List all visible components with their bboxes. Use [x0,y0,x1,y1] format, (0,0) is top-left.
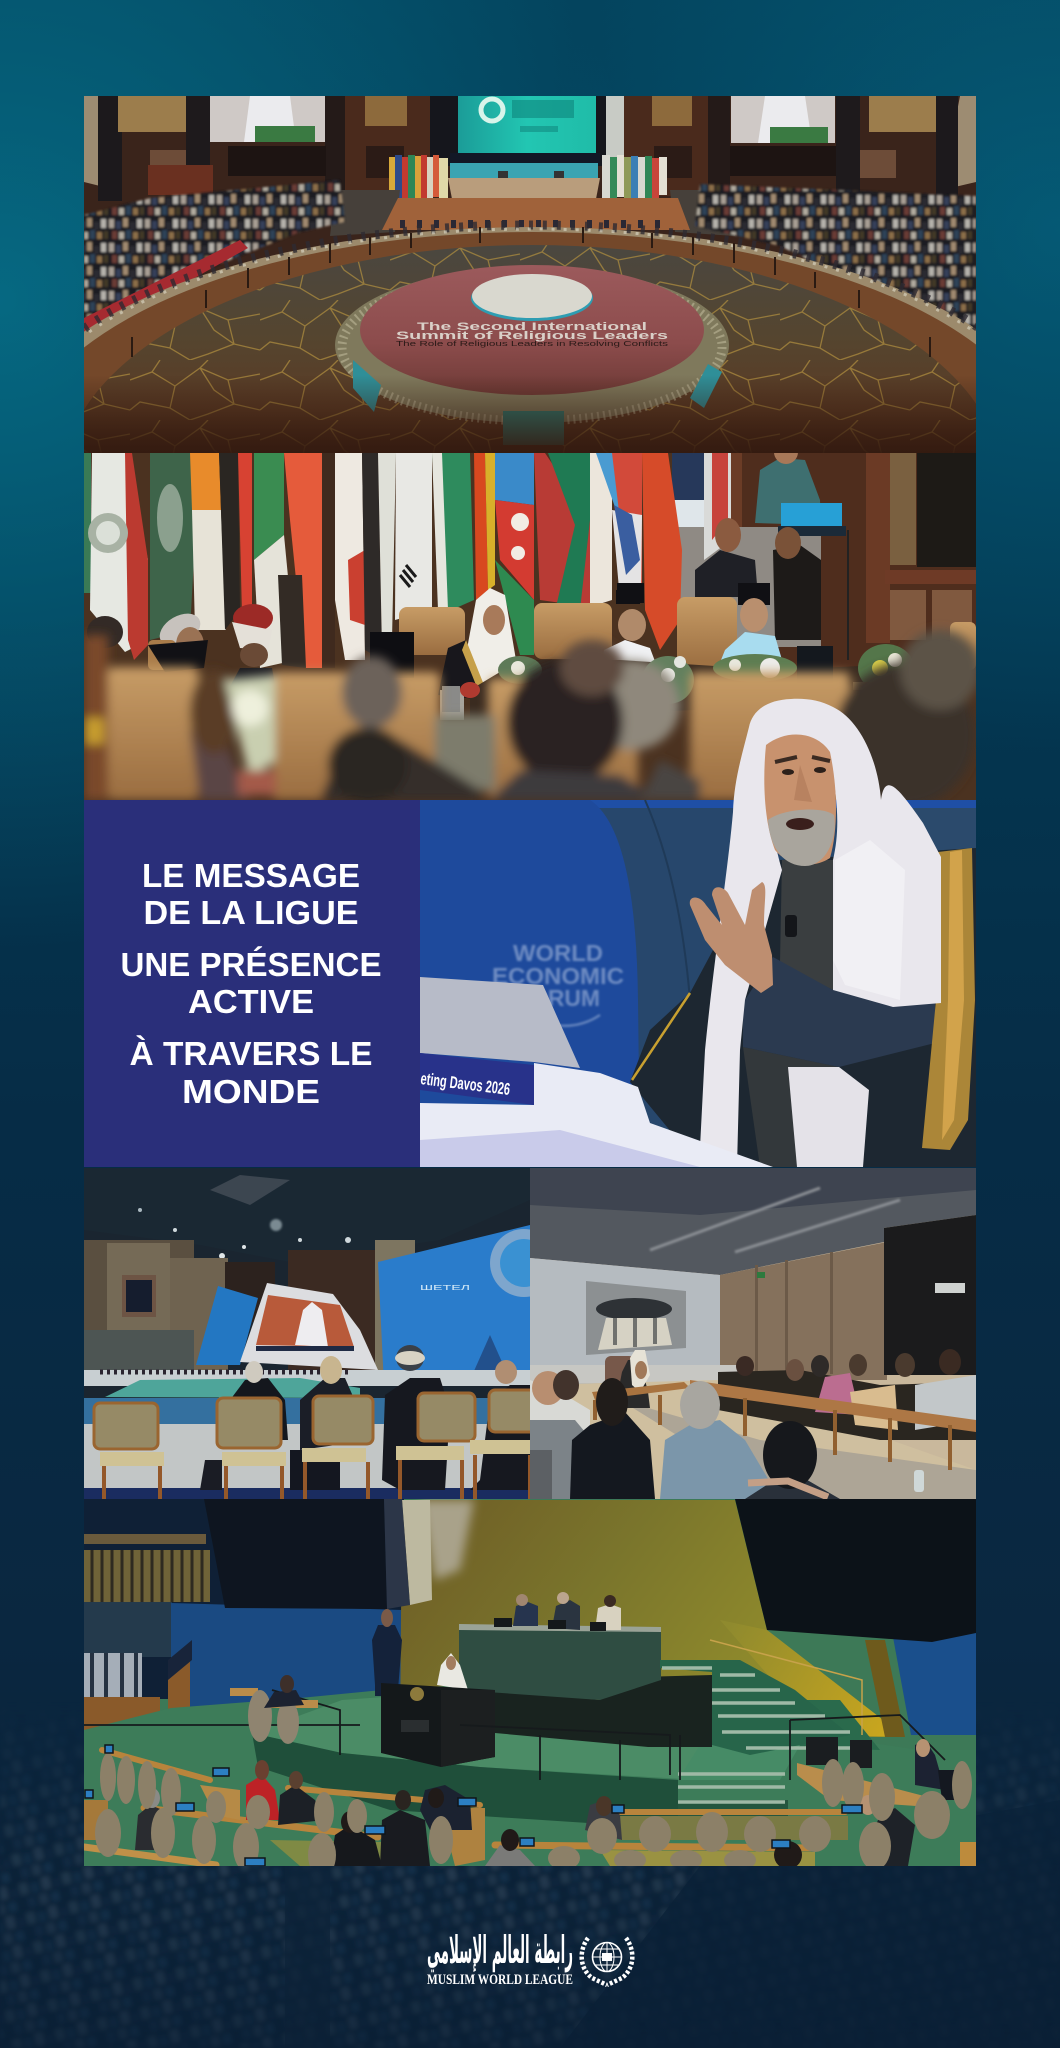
foreground delegates [530,1370,924,1499]
white wall [530,1258,720,1385]
Davos stage backdrop [420,800,976,1167]
painting [586,1281,686,1355]
photo: meeting room with delegates [530,1168,976,1499]
heading: une presence active: ACTIVE [188,983,314,1020]
centre disc with summit text: The Role of Religious Leaders in Resolving Conflicts [396,341,669,348]
table flower arrangements [498,644,914,704]
delegates desk rows [84,1750,845,1865]
flags left and right of the stage [389,155,667,201]
wood panelling [720,1242,887,1380]
delegate seats [95,1753,972,1877]
photo: summit of religious leaders hall [84,96,976,453]
railings [60,1690,945,1780]
centre stage screen [448,96,600,199]
World Economic Forum logo [492,940,624,1026]
secretariat seated left [84,1640,192,1737]
heading: le message de la ligue: LE MESSAGE [142,857,360,894]
interpreters desk left [230,1675,318,1744]
laptop [420,977,580,1068]
heading: le message de la ligue: DE LA LIGUE [144,894,358,931]
delegates seen from behind [200,1345,530,1490]
side screens [210,96,835,143]
red carpet aisle [84,240,248,340]
audience left [84,180,345,332]
heading: a travers le monde: À TRAVERS LE [130,1035,372,1072]
gold chairs row [94,1390,539,1499]
curved delegates table [10,225,1054,717]
blurred foreground chairs and heads [84,630,980,807]
dark ceiling panels [204,1499,976,1642]
seated dignitaries and chairs [87,518,976,720]
World Economic Forum logo: ECONOMIC [492,963,624,989]
icon: globe emblem with laurel wreath [582,1938,632,1985]
photo: speaker at Davos [420,698,976,1167]
desk monitors [85,1745,862,1866]
speaker figure [630,699,976,1167]
heading: le message de la ligue [142,857,360,931]
face and beard [764,735,836,865]
World Economic Forum logo: WORLD [513,940,603,966]
photo: United Nations General Assembly [84,1499,976,1866]
background crowd texture [0,1764,1045,2046]
English wordmark: MUSLIM WORLD LEAGUE [427,1972,573,1988]
presiding officers [494,1592,621,1631]
video screen on white panel [240,1283,378,1370]
heading: a travers le monde: MONDE [182,1073,320,1110]
heading: a travers le monde [130,1035,372,1110]
text: رابطة العالم الإسلامي [427,1928,573,1973]
teal table signs [353,360,722,445]
row of national flags [84,453,731,668]
raised hand [690,882,773,993]
right side desk [797,1737,957,1808]
ceiling [530,1168,976,1275]
audience right [695,184,976,348]
dark wall block [884,1215,976,1375]
white headdress [699,699,941,1167]
green floor and platform [84,1685,976,1866]
blue walls [171,1603,402,1710]
upper left balcony [84,1499,404,1699]
white podium [420,1063,773,1167]
Davos 2026 label [420,1053,534,1105]
floor in front of stage [330,190,735,236]
centre disc with summit text: The Second International [417,321,647,333]
hall back wall [84,96,976,201]
panel: navy title block [84,800,420,1167]
floor [530,1380,976,1499]
delegates [135,1760,915,1869]
conference table with green centre [84,1370,530,1499]
blue stage backdrop [196,1225,558,1385]
desk surfaces [84,1785,976,1866]
marble rostrum [459,1624,712,1747]
wood wall with podium speaker [672,440,976,678]
photo: conference hall with blue stage [84,1168,530,1499]
marble band [530,1365,740,1383]
heading: une presence active: UNE PRÉSENCE [120,946,382,983]
centre disc with summit text [360,265,704,395]
stairs [660,1640,872,1824]
hall ceiling and walls [84,1168,530,1385]
blue stage backdrop: ШЕТЕЛ [420,1285,471,1292]
logo: Muslim World League [427,1928,632,1988]
security officer [372,1609,402,1696]
Davos 2026 label: eting Davos 2026 [420,1069,511,1099]
centre disc with summit text: Summit of Religious Leaders [396,330,668,342]
lectern with speaker [381,1653,495,1767]
seated delegates and tables [592,1349,976,1470]
World Economic Forum logo: FORUM [516,985,600,1011]
gold wall [400,1500,905,1737]
centre disc flower ring [335,267,729,423]
photo: flags and delegates [84,453,976,800]
heading: une presence active [120,946,382,1020]
